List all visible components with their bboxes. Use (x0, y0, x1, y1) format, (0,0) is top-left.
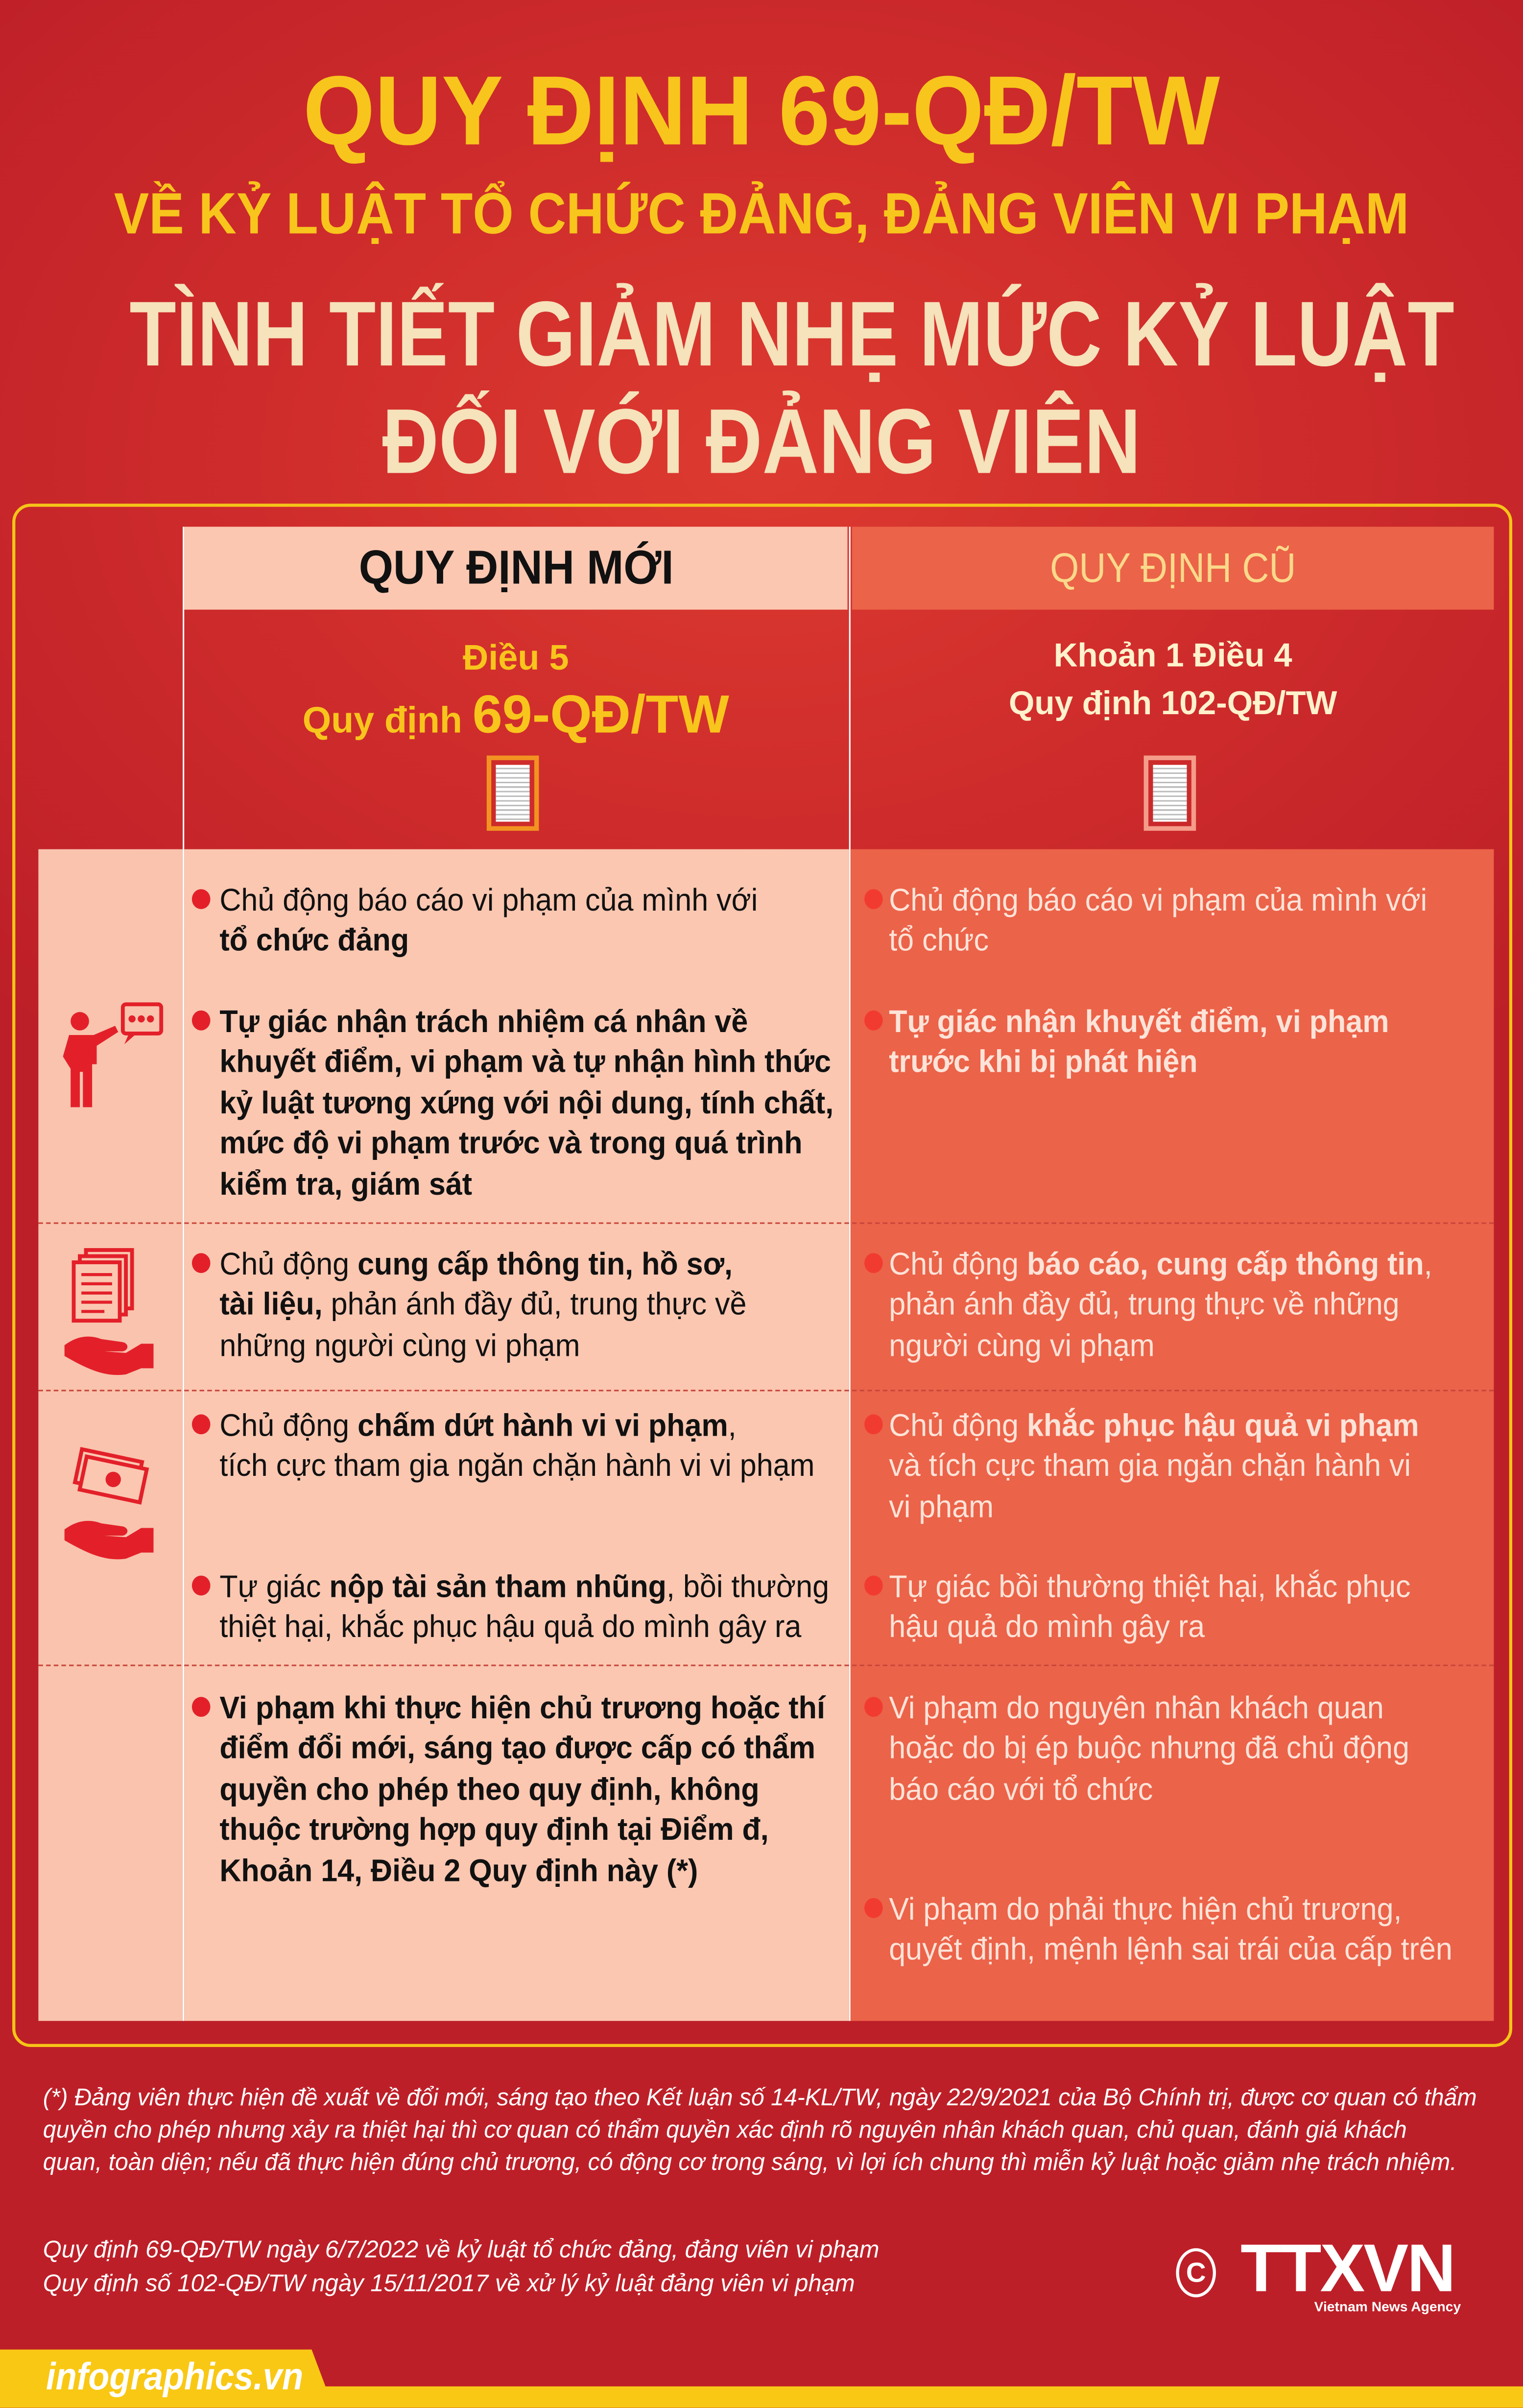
header: quy dinh cu: QUY ĐỊNH CŨ (1050, 545, 1296, 591)
icon: document old (1144, 755, 1196, 831)
title: VỀ KỶ LUẬT TỔ CHỨC ĐẢNG, ĐẢNG VIÊN VI PHẠM (114, 183, 1409, 247)
vertical divider lines (182, 527, 184, 2021)
sources: Quy định 69-QĐ/TW ngày 6/7/2022 về kỷ luật tổ chức đảng, đảng viên vi phạm (43, 2238, 879, 2264)
text block: new rules: mức độ vi phạm trước và trong quá trình (219, 1126, 803, 1161)
text block: new rules: Chủ động cung cấp thông tin, hồ sơ, (219, 1247, 733, 1282)
text block: old rules: quyết định, mệnh lệnh sai trái của cấp trên (889, 1932, 1452, 1968)
text block: old rules: Vi phạm do nguyên nhân khách quan (889, 1691, 1384, 1726)
text block: new rules: tài liệu, phản ánh đầy đủ, trung thực về (219, 1287, 746, 1323)
text block: old rules: Tự giác nhận khuyết điểm, vi phạm (889, 1004, 1389, 1039)
title: TÌNH TIẾT GIẢM NHẸ MỨC KỶ LUẬT (129, 283, 1454, 385)
footnote (43, 2085, 1477, 2176)
text block: old rules: phản ánh đầy đủ, trung thực về những (889, 1287, 1400, 1323)
text block: new rules: Khoản 14, Điều 2 Quy định này (*) (219, 1853, 698, 1888)
subheader: new source (303, 637, 729, 831)
title: ĐỐI VỚI ĐẢNG VIÊN (382, 390, 1141, 493)
footnote: quan, toàn diện; nếu đã thực hiện đúng chủ trương, có động cơ trong sáng, vì lợi ích chung thì miễn kỷ luật hoặc giảm nhẹ trách nhiệm. (43, 2150, 1457, 2176)
text block: new rules: kỷ luật tương xứng với nội dung, tính chất, (219, 1085, 833, 1121)
text block: old rules: Chủ động báo cáo, cung cấp thông tin, (889, 1247, 1432, 1282)
subheader: old source (1009, 637, 1337, 831)
footer: infographics.vn tab: infographics.vn (46, 2356, 303, 2399)
text block: old rules: Tự giác bồi thường thiệt hại, khắc phục (889, 1569, 1411, 1605)
logo: TTXVN: Vietnam News Agency (1314, 2299, 1461, 2314)
text block: new rules: thuộc trường hợp quy định tại Điểm đ, (219, 1812, 769, 1848)
text block: new rules: thiệt hại, khắc phục hậu quả do mình gây ra (219, 1610, 801, 1645)
text block: old rules: Chủ động báo cáo vi phạm của mình với (889, 883, 1427, 918)
text block: new rules: Vi phạm khi thực hiện chủ trương hoặc thí (219, 1691, 825, 1726)
title (114, 55, 1454, 493)
text block: new rules: Tự giác nhận trách nhiệm cá nhân về (219, 1004, 748, 1039)
footnote: (*) Đảng viên thực hiện đề xuất về đổi mới, sáng tạo theo Kết luận số 14-KL/TW, ngày 22/9/2021 của Bộ Chính trị, được cơ quan có thẩm (43, 2085, 1477, 2112)
text block: new rules: những người cùng vi phạm (219, 1328, 580, 1363)
text block: new rules: tổ chức đảng (219, 923, 409, 959)
panel: comparison table (12, 504, 1512, 2047)
text block: new rules: quyền cho phép theo quy định, không (219, 1772, 760, 1807)
text block: old rules: trước khi bị phát hiện (889, 1045, 1198, 1080)
text block: old rules: vi phạm (889, 1489, 994, 1525)
text block: new rules (192, 883, 833, 1888)
text block: new rules: tích cực tham gia ngăn chặn hành vi vi phạm (219, 1449, 815, 1484)
logo: TTXVN: TTXVN (1240, 2231, 1454, 2307)
subheader: new source: Điều 5 (463, 637, 569, 677)
text block: new rules: Tự giác nộp tài sản tham nhũng, bồi thường (219, 1569, 829, 1605)
text block: old rules (864, 883, 1452, 1968)
sources (43, 2238, 879, 2297)
footer: infographics.vn tab (0, 2349, 1523, 2408)
text block: new rules: kiểm tra, giám sát (219, 1166, 472, 1202)
text block: old rules: Chủ động khắc phục hậu quả vi phạm (889, 1408, 1419, 1444)
header: quy dinh moi: QUY ĐỊNH MỚI (358, 541, 673, 594)
sources: Quy định số 102-QĐ/TW ngày 15/11/2017 về xử lý kỷ luật đảng viên vi phạm (43, 2271, 855, 2297)
text block: old rules: và tích cực tham gia ngăn chặn hành vi (889, 1449, 1411, 1484)
row dividers (38, 1223, 1494, 1224)
text block: old rules: báo cáo với tổ chức (889, 1772, 1153, 1807)
text block: new rules: khuyết điểm, vi phạm và tự nhận hình thức (219, 1045, 831, 1080)
title: QUY ĐỊNH 69-QĐ/TW (303, 55, 1220, 166)
icon: document new (487, 755, 539, 831)
text block: old rules: hậu quả do mình gây ra (889, 1610, 1205, 1645)
icon: money in hand (65, 1447, 154, 1560)
text block: old rules: người cùng vi phạm (889, 1328, 1155, 1363)
text block: old rules: hoặc do bị ép buộc nhưng đã chủ động (889, 1732, 1409, 1767)
body background columns (38, 849, 182, 2021)
subheader: old source: Quy định 102-QĐ/TW (1009, 685, 1337, 722)
text block: old rules: Vi phạm do phải thực hiện chủ trương, (889, 1892, 1402, 1927)
text block: new rules: Chủ động chấm dứt hành vi vi phạm, (219, 1408, 737, 1444)
subheader: new source: Quy định 69-QĐ/TW (303, 685, 729, 745)
text block: new rules: điểm đổi mới, sáng tạo được cấp có thẩm (219, 1732, 815, 1767)
footnote: quyền cho phép nhưng xảy ra thiệt hại thì cơ quan có thẩm quyền xác định rõ nguyên nhân khách quan, chủ quan, đánh giá khách (43, 2118, 1407, 2144)
icon: person speaking (63, 1002, 164, 1107)
logo: TTXVN: C (1186, 2258, 1206, 2288)
icon: documents in hand (65, 1248, 154, 1375)
logo: TTXVN (1176, 2231, 1461, 2314)
text block: new rules: Chủ động báo cáo vi phạm của mình với (219, 883, 758, 918)
text block: old rules: tổ chức (889, 923, 989, 959)
subheader: old source: Khoản 1 Điều 4 (1054, 637, 1292, 674)
header: quy dinh cu (852, 527, 1494, 610)
header: quy dinh moi (184, 527, 848, 610)
